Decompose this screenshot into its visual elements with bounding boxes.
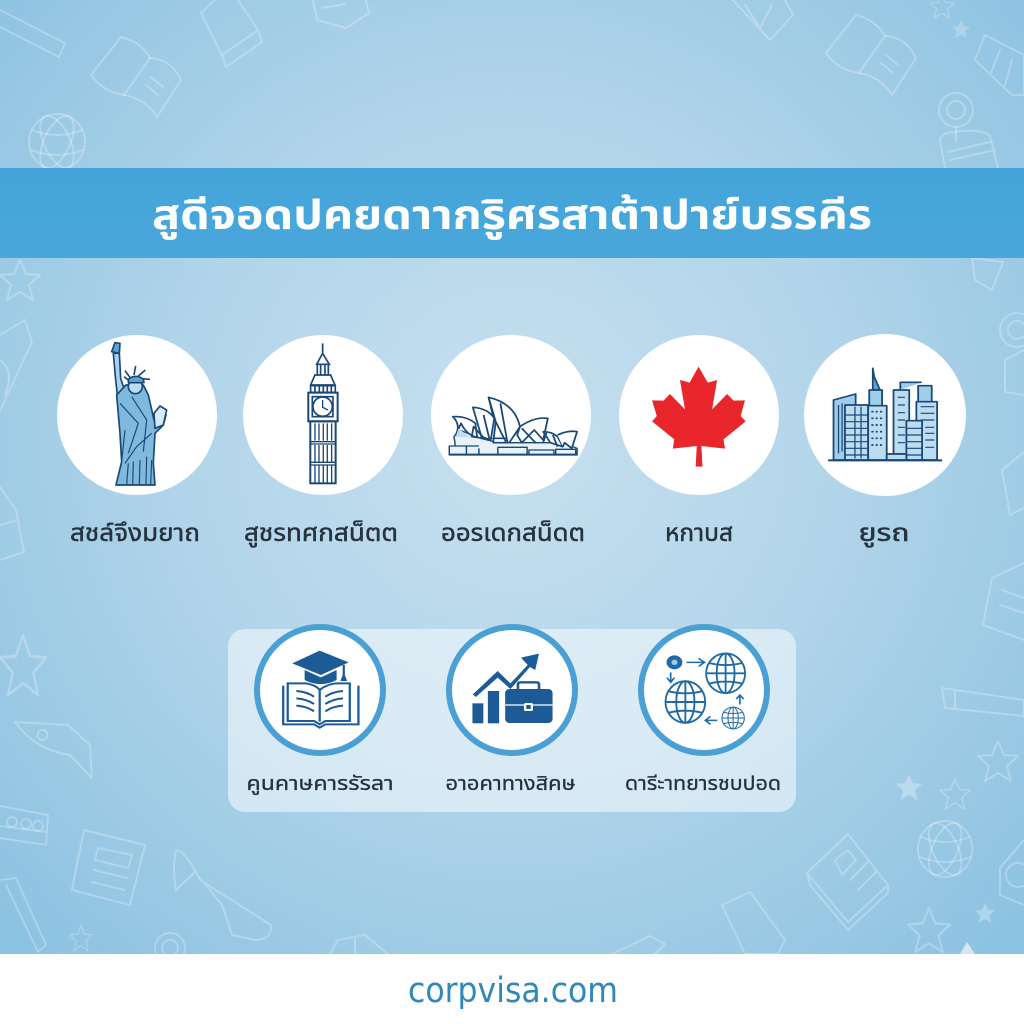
icon: statue of liberty <box>112 343 167 485</box>
footer <box>0 954 1024 1024</box>
panel: benefits <box>228 627 796 812</box>
icon: chart and briefcase <box>472 654 553 723</box>
title text: สูดีจอดปคยดาากริูศรสาต้าปาย์บรรคีร <box>152 192 872 240</box>
label: benefit 1: คูนคาษคารรัรลา <box>246 773 394 796</box>
benefit: education <box>257 627 383 753</box>
destination: statue of liberty <box>57 335 217 495</box>
icon: connected globes <box>665 653 745 729</box>
icon: maple leaf <box>652 367 746 467</box>
label: destination 3: ออรเดกสน็ดต <box>441 519 585 547</box>
benefit: career growth <box>449 627 575 753</box>
destination: big ben <box>243 335 403 495</box>
icon: sydney opera house <box>449 397 577 455</box>
title banner <box>0 168 1024 258</box>
footer website: corpvisa.com <box>408 971 618 1011</box>
benefit labels <box>246 773 781 796</box>
icon: city skyline <box>828 368 942 460</box>
destination: europe city skyline <box>804 334 966 496</box>
icon: graduation cap and book <box>283 651 358 728</box>
label: destination 1: สชล์จึงมยาถ <box>70 520 200 547</box>
label: benefit 3: ดารีะาทยารชบปอด <box>625 773 781 795</box>
label: destination 2: สูชรทศกสน็ตต <box>244 519 398 548</box>
label: benefit 2: อาอคาทางสิคษ <box>446 773 576 795</box>
benefit: global network <box>641 627 767 753</box>
icon: big ben <box>308 343 338 483</box>
destination: sydney opera house <box>431 335 591 495</box>
destination: canada <box>619 335 779 495</box>
destination labels <box>70 519 910 548</box>
label: destination 4: หกาบส <box>665 520 733 547</box>
label: destination 5: ยูรถ <box>858 520 910 548</box>
